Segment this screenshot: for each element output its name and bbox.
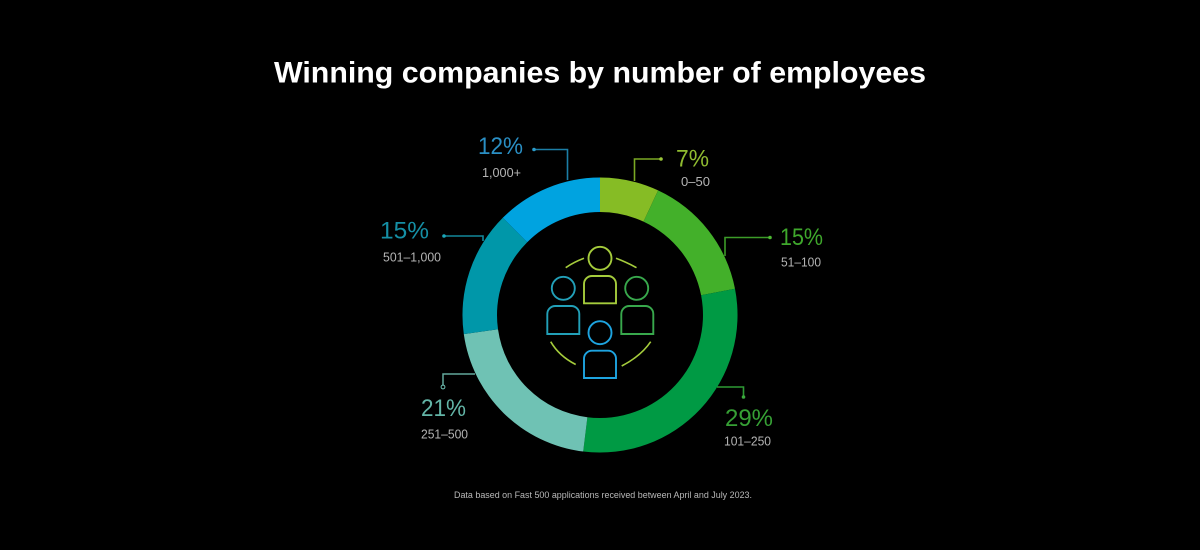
leader line bbox=[443, 374, 475, 385]
leader line bbox=[634, 159, 661, 181]
value: 15% bbox=[780, 224, 823, 251]
leader line bbox=[725, 238, 770, 256]
value: 12% bbox=[478, 133, 523, 160]
callout: 1,000+ 12% bbox=[478, 133, 568, 180]
title: Winning companies by number of employees bbox=[274, 56, 926, 90]
callout: 501–1,000 15% bbox=[380, 218, 483, 264]
callout: 0–50 7% bbox=[634, 146, 710, 189]
person: right bbox=[621, 277, 653, 334]
person: bottom bbox=[584, 321, 616, 378]
segment: 251–500 21% bbox=[464, 329, 587, 452]
segment: 101–250 29% bbox=[583, 289, 738, 453]
range: 1,000+ bbox=[482, 166, 521, 180]
range: 51–100 bbox=[781, 256, 821, 270]
callout: 101–250 29% bbox=[717, 387, 773, 448]
range: 101–250 bbox=[724, 434, 771, 448]
range: 251–500 bbox=[421, 428, 468, 442]
segment: 0–50 7% bbox=[600, 178, 658, 222]
icon: group of four people bbox=[547, 247, 653, 378]
value: 29% bbox=[725, 405, 773, 432]
donut chart bbox=[462, 178, 738, 453]
leader line bbox=[444, 236, 483, 241]
leader line bbox=[534, 150, 568, 180]
segment: 1,000+ 12% bbox=[503, 178, 600, 242]
value: 7% bbox=[676, 146, 709, 172]
person: left bbox=[547, 277, 579, 334]
leader line bbox=[717, 387, 744, 397]
value: 15% bbox=[380, 218, 429, 244]
value: 21% bbox=[421, 395, 466, 422]
callout: 51–100 15% bbox=[725, 224, 823, 270]
range: 501–1,000 bbox=[383, 250, 441, 264]
callout: 251–500 21% bbox=[421, 374, 475, 442]
segment: 51–100 15% bbox=[644, 190, 735, 295]
connecting arcs bbox=[551, 258, 651, 366]
segment: 501–1,000 15% bbox=[462, 218, 527, 334]
person: top bbox=[584, 247, 616, 303]
range: 0–50 bbox=[681, 175, 710, 189]
footnote: Data based on Fast 500 applications received between April and July 2023. bbox=[454, 490, 752, 500]
